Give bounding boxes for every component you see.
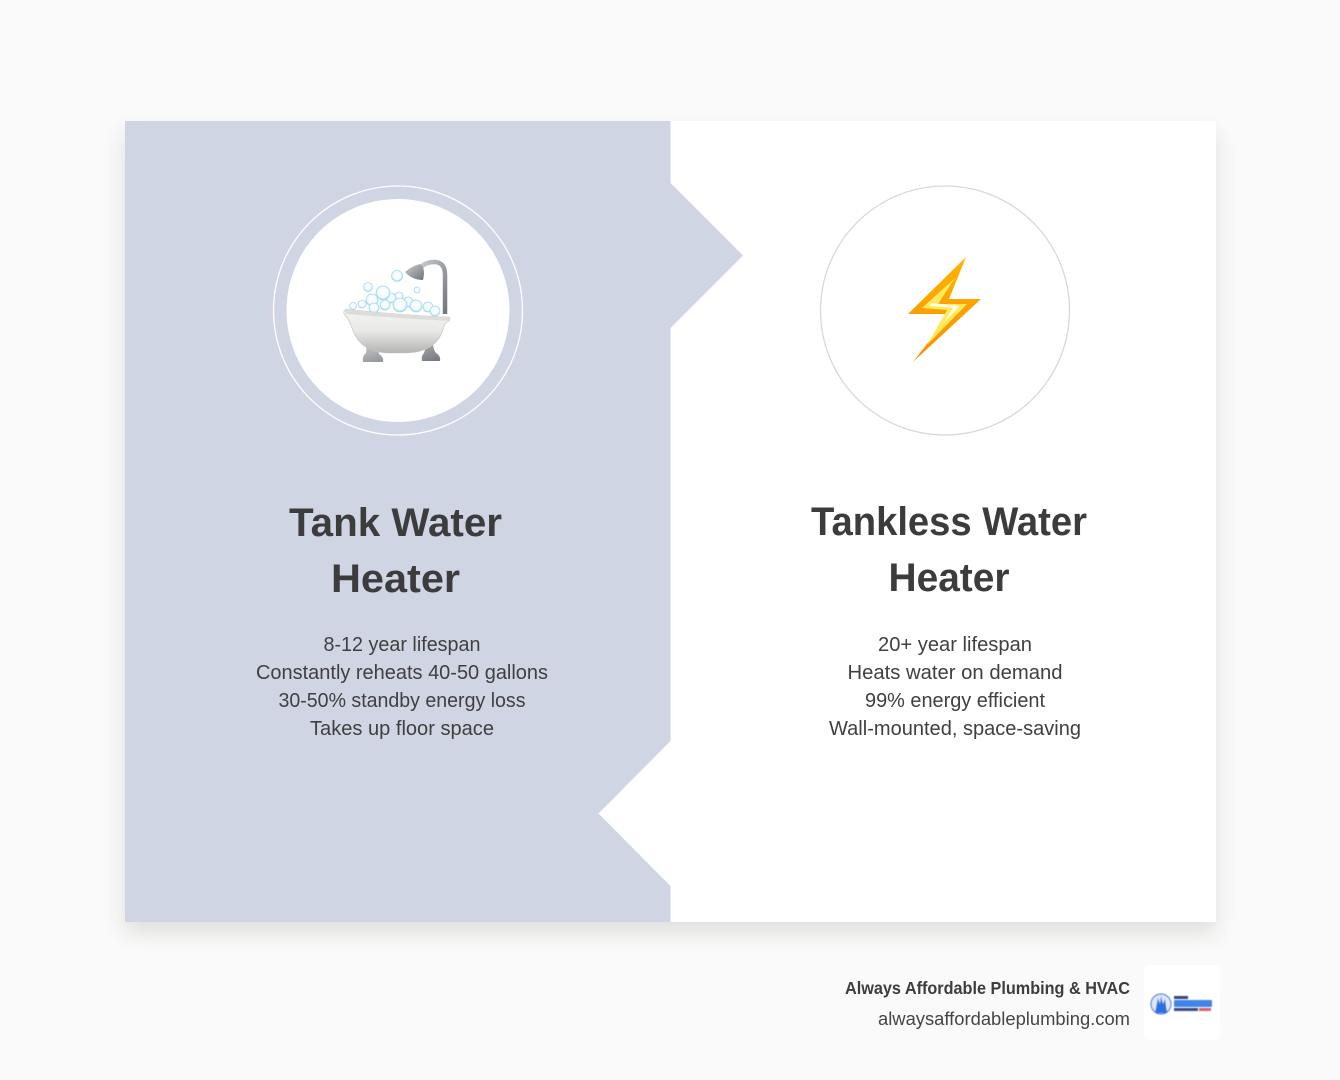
comparison card <box>125 121 1216 922</box>
text: tank water heater facts: 30-50% standby energy loss <box>278 690 526 712</box>
icon: tank circle badge <box>274 186 522 435</box>
heading: tankless water heater: Heater <box>888 556 1010 600</box>
heading: tankless water heater <box>811 500 1087 600</box>
heading: tank water heater: Tank Water <box>289 501 502 545</box>
text: tank water heater facts: Takes up floor space <box>310 718 494 740</box>
footer: website: alwaysaffordableplumbing.com <box>878 1008 1130 1029</box>
text: tankless water heater facts: 20+ year lifespan <box>878 634 1032 656</box>
heading: tankless water heater: Tankless Water <box>811 500 1087 544</box>
panel: tankless water heater background <box>125 121 1216 922</box>
text: tankless water heater facts: 99% energy efficient <box>865 690 1045 712</box>
text: tankless water heater facts: Heats water on demand <box>848 662 1062 684</box>
icon: lightning circle badge <box>820 186 1070 435</box>
heading: tank water heater <box>289 501 502 601</box>
card shadow <box>125 133 1216 933</box>
footer: company name: Always Affordable Plumbing & HVAC <box>845 978 1130 998</box>
text: tank water heater facts: 8-12 year lifespan <box>324 634 480 656</box>
text: tankless water heater facts: Wall-mounted, space-saving <box>829 718 1081 740</box>
icon: lightning bolt <box>908 257 981 362</box>
text: tankless water heater facts <box>829 634 1081 740</box>
text: tank water heater facts: Constantly reheats 40-50 gallons <box>256 662 548 684</box>
icon: bathtub <box>344 262 450 362</box>
panel: tank water heater background <box>125 121 743 922</box>
footer: company logo <box>1144 965 1220 1040</box>
text: tank water heater facts <box>256 634 548 740</box>
heading: tank water heater: Heater <box>331 557 460 601</box>
